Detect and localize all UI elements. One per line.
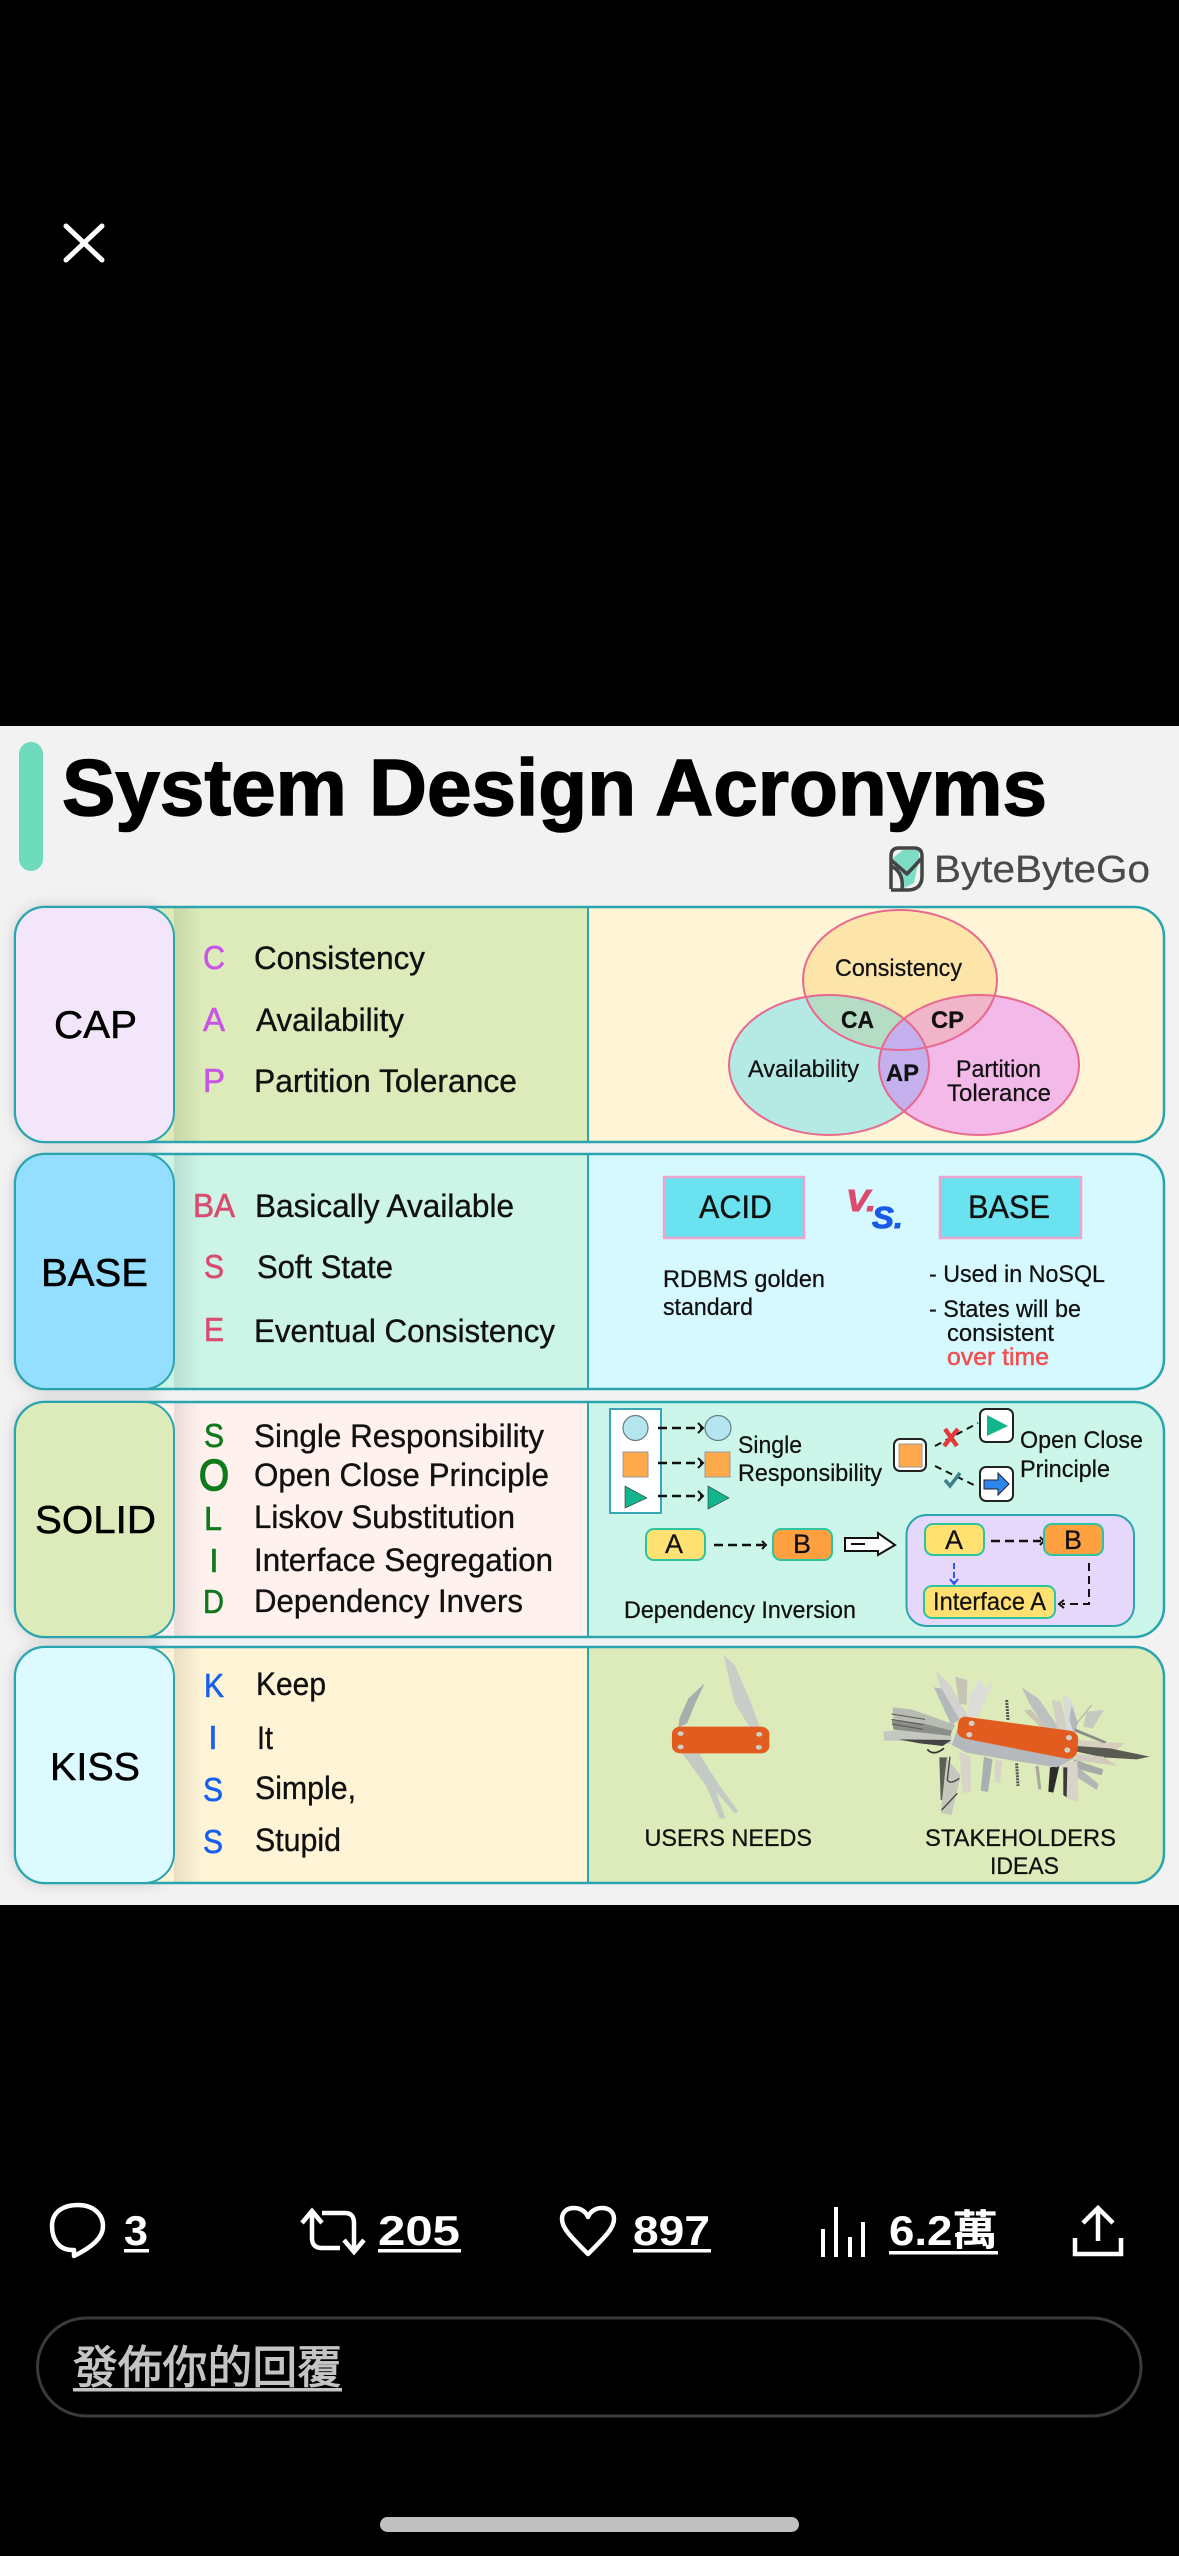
BASE description (929, 1261, 1105, 1371)
KISS list: S (203, 1771, 223, 1808)
SOLID list: L (204, 1500, 222, 1537)
BASE description: over time (947, 1344, 1049, 1371)
home indicator (380, 2517, 799, 2532)
BASE description: - States will be (929, 1296, 1081, 1323)
versus mark: S. (872, 1200, 903, 1235)
brand logo: ByteByteGo (934, 849, 1150, 891)
BASE list: E (204, 1311, 224, 1348)
Venn diagram: CP (931, 1007, 964, 1034)
ACID description: RDBMS golden (663, 1266, 825, 1293)
stats bar (52, 2205, 1121, 2257)
open close diagram: Open Close (1020, 1427, 1143, 1454)
BASE list: S (204, 1248, 224, 1285)
BASE description: - Used in NoSQL (929, 1261, 1105, 1288)
comment count: 3 (124, 2207, 148, 2254)
CAP label: CAP (54, 1004, 137, 1047)
dependency inversion diagram: A (665, 1529, 683, 1559)
dependency inversion diagram: Interface A (933, 1588, 1046, 1616)
title accent bar (19, 742, 43, 871)
single responsibility diagram: Responsibility (738, 1460, 882, 1487)
KISS list: Stupid (255, 1822, 341, 1858)
dependency inversion diagram: A (945, 1525, 963, 1555)
CAP list: P (203, 1062, 225, 1099)
reply input: 發佈你的回覆 (73, 2331, 342, 2396)
BASE box (940, 1177, 1081, 1238)
open close diagram (894, 1409, 1143, 1501)
icon: views (821, 2207, 865, 2257)
CAP list (203, 939, 517, 1099)
icon: heart (562, 2208, 614, 2254)
single responsibility diagram: Single (738, 1432, 802, 1459)
ACID box (664, 1177, 804, 1238)
dependency inversion diagram: Dependency Inversion (624, 1597, 856, 1624)
SOLID list: Liskov Substitution (254, 1499, 515, 1535)
title: System Design Acronyms (62, 743, 1047, 832)
BASE list: Soft State (257, 1249, 393, 1285)
BASE description: consistent (947, 1320, 1054, 1347)
KISS list (203, 1666, 356, 1860)
SOLID list (199, 1417, 553, 1620)
ACID description (663, 1266, 825, 1321)
BASE box: BASE (968, 1189, 1050, 1225)
panel: CAP (15, 907, 1164, 1142)
SOLID list: Single Responsibility (254, 1418, 544, 1454)
infographic (0, 726, 1179, 1905)
KISS list: S (203, 1823, 223, 1860)
ACID description: standard (663, 1294, 753, 1321)
SOLID list: S (204, 1417, 224, 1454)
CAP list: Partition Tolerance (254, 1063, 517, 1099)
Venn diagram: Tolerance (947, 1080, 1051, 1107)
CAP list: C (203, 939, 225, 976)
panel: BASE (15, 1154, 1164, 1389)
knife caption: stakeholders ideas: STAKEHOLDERS (925, 1825, 1116, 1852)
Venn diagram: Availability (748, 1056, 859, 1083)
CAP list: Consistency (254, 940, 425, 976)
KISS list: Keep (256, 1666, 326, 1702)
BASE list: Eventual Consistency (254, 1313, 555, 1349)
knife caption: users needs: USERS NEEDS (644, 1825, 812, 1852)
dependency inversion diagram (624, 1515, 1134, 1626)
BASE list (193, 1187, 555, 1349)
dependency inversion diagram: B (793, 1529, 811, 1559)
icon: overloaded pocket knife (883, 1671, 1150, 1815)
versus mark (846, 1183, 903, 1235)
BASE list: Basically Available (255, 1188, 514, 1224)
SOLID list: O (199, 1451, 229, 1500)
SOLID list: I (209, 1542, 219, 1579)
SOLID list: Dependency Invers (254, 1583, 523, 1619)
ACID box: ACID (699, 1189, 772, 1225)
icon: share (1075, 2208, 1121, 2254)
SOLID label: SOLID (35, 1499, 156, 1542)
dependency inversion diagram: B (1064, 1525, 1082, 1555)
icon: comment (52, 2205, 103, 2256)
Venn diagram (729, 910, 1079, 1135)
KISS label: KISS (50, 1746, 140, 1789)
KISS list: I (208, 1719, 218, 1756)
close button (66, 226, 102, 260)
panel: KISS (15, 1647, 1164, 1883)
icon: repost (302, 2211, 364, 2252)
panel: SOLID (15, 1402, 1164, 1637)
open close diagram: Principle (1020, 1456, 1110, 1483)
like count: 897 (633, 2207, 710, 2254)
repost count: 205 (378, 2207, 460, 2254)
KISS list: K (204, 1667, 224, 1704)
BASE label: BASE (41, 1252, 148, 1295)
BASE list: BA (193, 1187, 235, 1224)
single responsibility diagram (610, 1409, 882, 1513)
reply input (38, 2318, 1141, 2416)
CAP list: A (203, 1001, 225, 1038)
Venn diagram: CA (841, 1007, 874, 1034)
KISS list: It (257, 1720, 273, 1756)
Venn diagram: Consistency (835, 955, 962, 982)
icon: small pocket knife (672, 1655, 769, 1818)
Venn diagram: AP (886, 1060, 919, 1087)
SOLID list: Open Close Principle (254, 1457, 549, 1493)
view count: 6.2萬 (889, 2207, 998, 2254)
knife caption: stakeholders ideas: IDEAS (990, 1853, 1059, 1880)
versus mark: V. (846, 1183, 876, 1218)
knife caption: stakeholders ideas (925, 1825, 1116, 1880)
Venn diagram: Partition (956, 1056, 1041, 1083)
CAP list: Availability (256, 1002, 404, 1038)
KISS list: Simple, (255, 1770, 356, 1806)
SOLID list: D (203, 1583, 224, 1620)
SOLID list: Interface Segregation (254, 1542, 553, 1578)
